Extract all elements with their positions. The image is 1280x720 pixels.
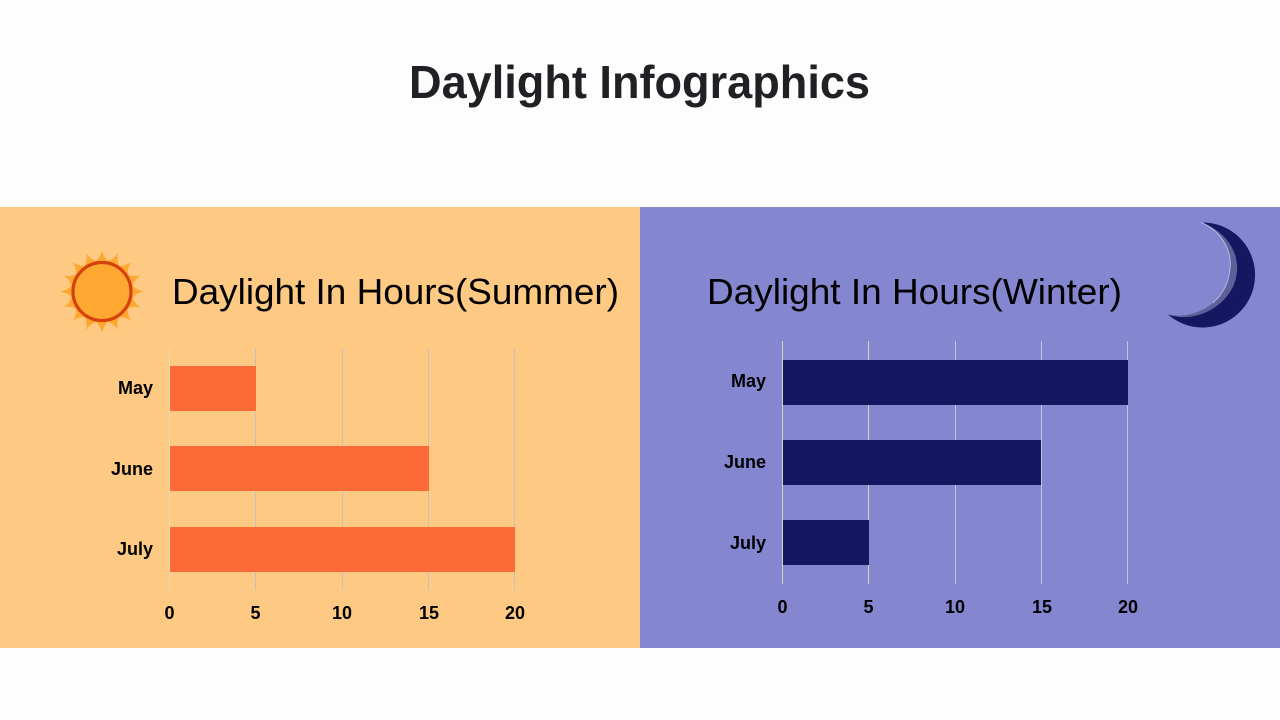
- bar chart: summer: [111, 348, 525, 623]
- value axis labels: 10: [945, 597, 965, 617]
- category labels: June: [111, 459, 153, 479]
- bar: June 15: [170, 446, 429, 491]
- category labels: [111, 378, 153, 559]
- bar: July 20: [170, 527, 515, 572]
- panel: summer: [0, 207, 640, 648]
- value axis labels: 0: [164, 603, 175, 623]
- bar chart: winter: [724, 341, 1138, 617]
- value axis labels: 15: [419, 603, 439, 623]
- icon: moon: [1168, 222, 1255, 327]
- value axis labels: 5: [250, 603, 261, 623]
- heading: summer: Daylight In Hours(Summer): [172, 271, 619, 312]
- value axis labels: 0: [777, 597, 788, 617]
- value axis labels: 20: [505, 603, 525, 623]
- heading: winter: Daylight In Hours(Winter): [707, 271, 1122, 312]
- bar: June 15: [783, 440, 1041, 485]
- title: Daylight Infographics: [409, 56, 870, 108]
- value axis labels: 20: [1118, 597, 1138, 617]
- category labels: [724, 371, 766, 553]
- category labels: June: [724, 452, 766, 472]
- category labels: July: [730, 533, 766, 553]
- value axis labels: [164, 603, 525, 623]
- category labels: July: [117, 539, 153, 559]
- value axis labels: 15: [1032, 597, 1052, 617]
- category labels: May: [731, 371, 766, 391]
- value axis labels: 5: [863, 597, 874, 617]
- category labels: May: [118, 378, 153, 398]
- panel: winter: [640, 207, 1280, 648]
- bar: May 20: [783, 360, 1128, 405]
- bar: May 5: [170, 366, 256, 411]
- bar: July 5: [783, 520, 869, 565]
- value axis labels: [777, 597, 1138, 617]
- icon: sun: [60, 250, 144, 333]
- value axis labels: 10: [332, 603, 352, 623]
